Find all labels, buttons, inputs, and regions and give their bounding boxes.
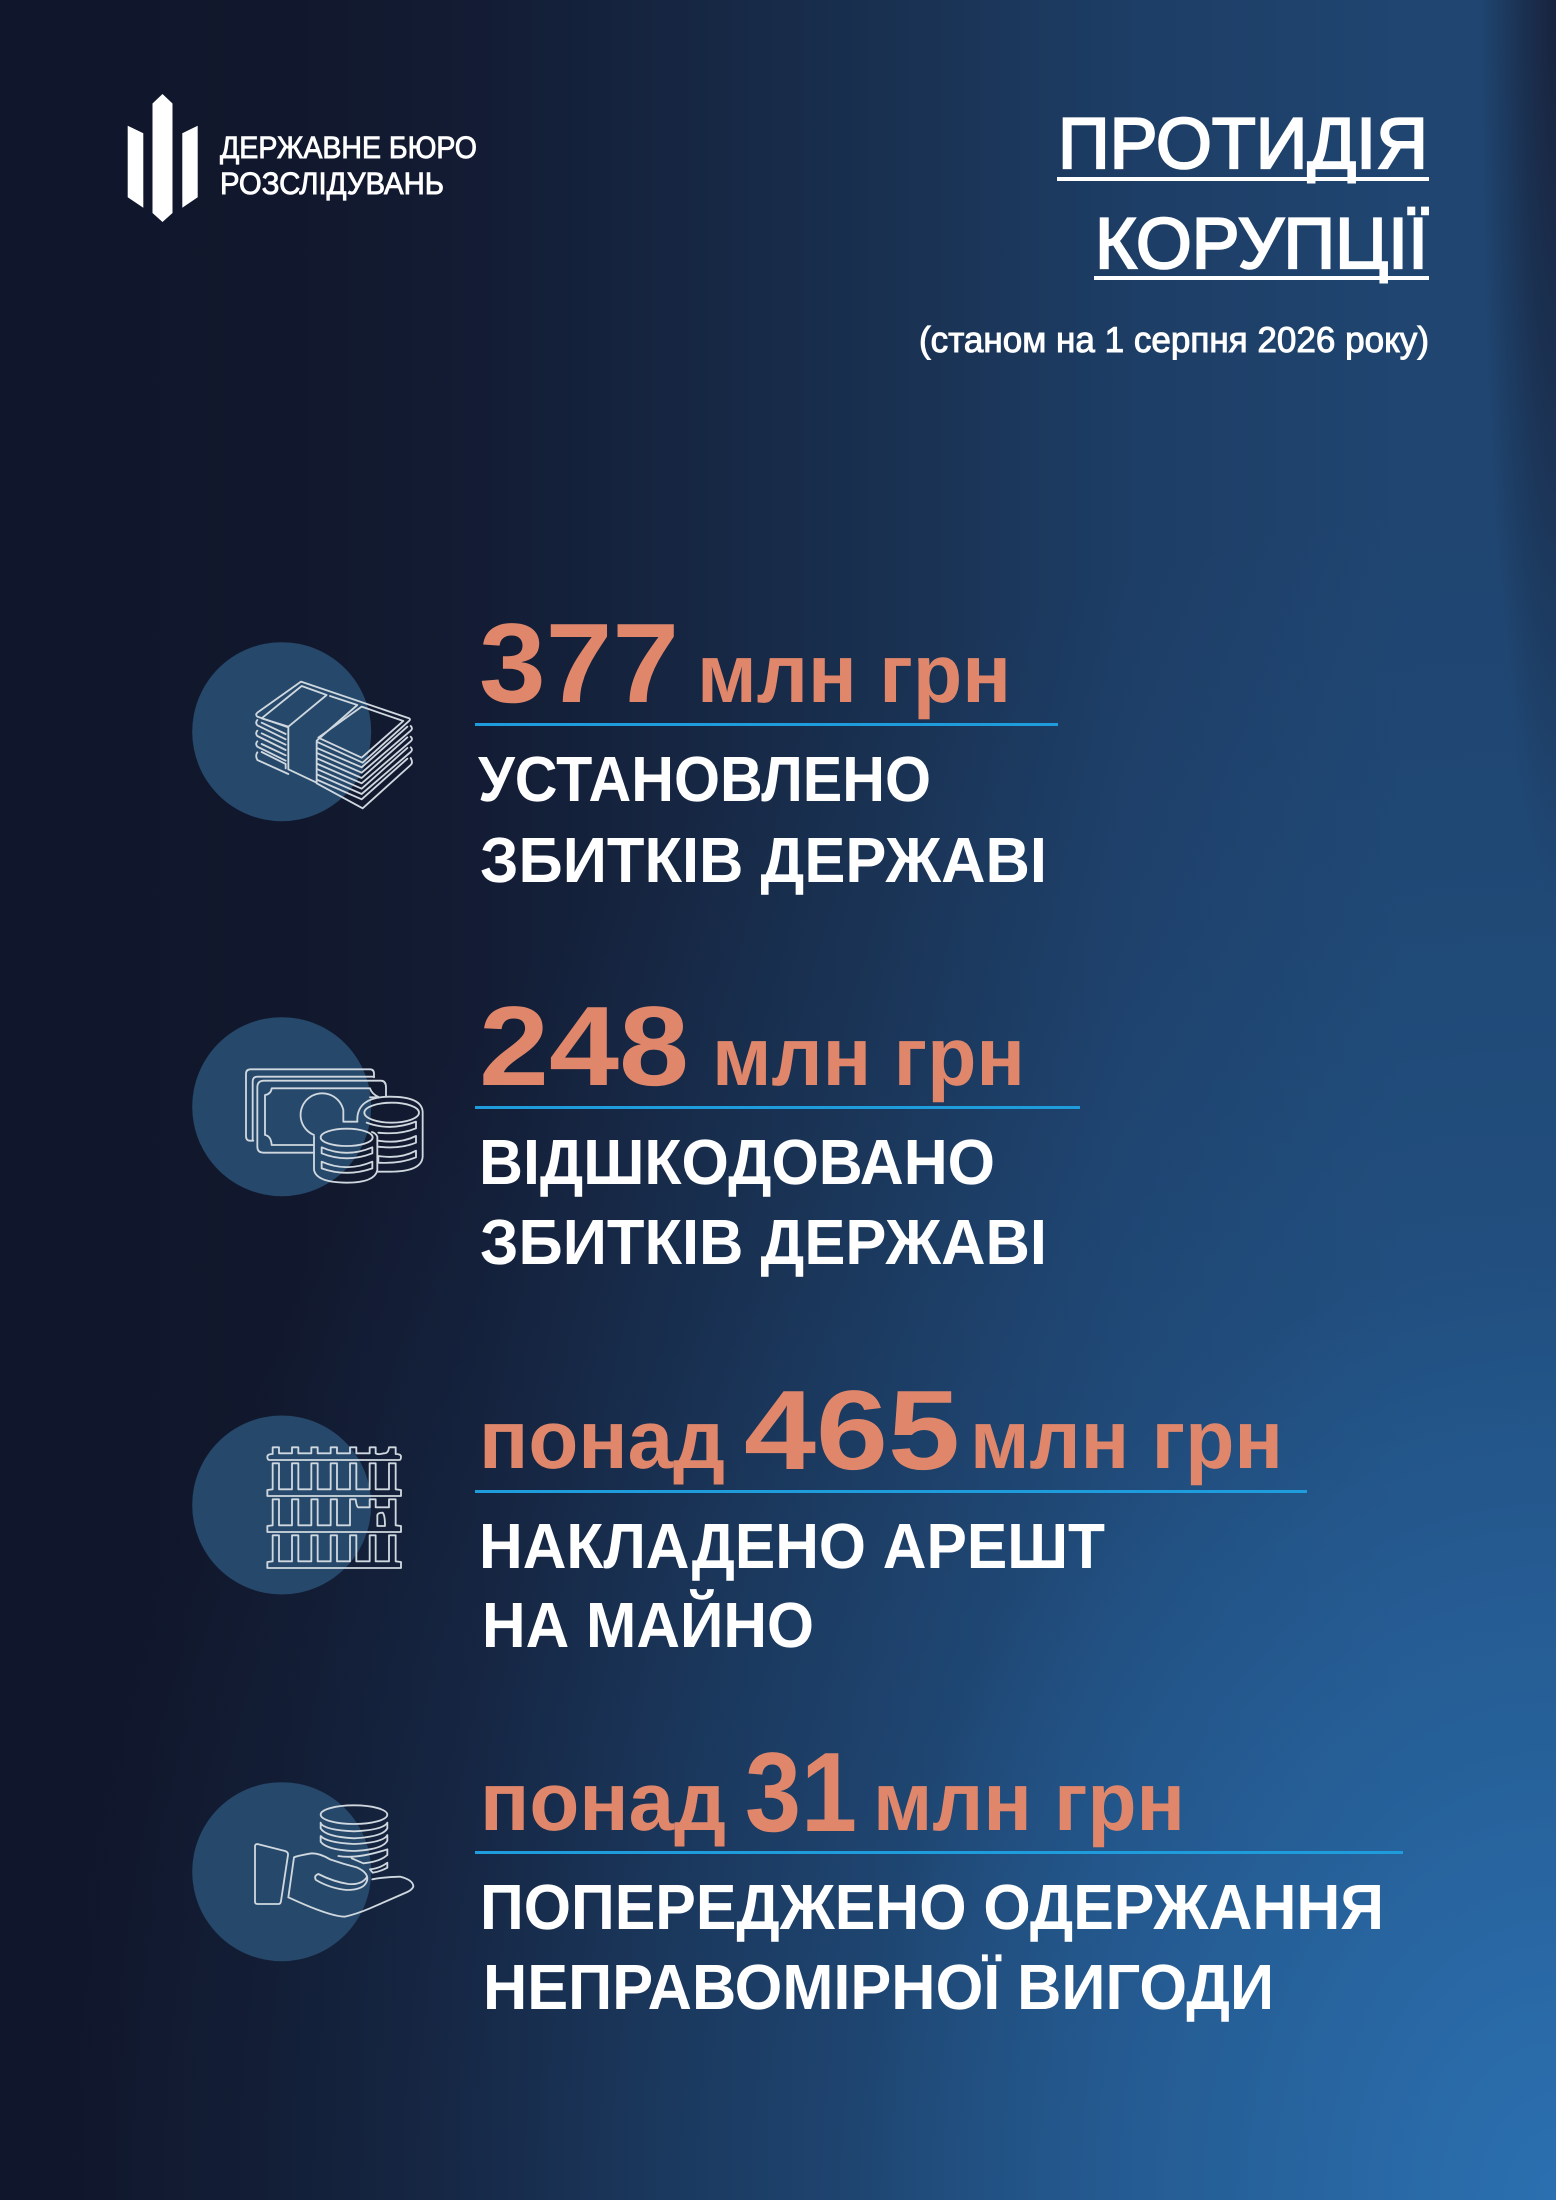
figure: 377 mln UAH: млн грн [697, 627, 1011, 720]
panel: property seized [192, 1367, 1307, 1661]
figure: 377 mln UAH: 377 [479, 600, 679, 726]
figure: over 31 mln UAH: 31 [745, 1729, 857, 1855]
caption: НАКЛАДЕНО АРЕШТ [479, 1510, 1105, 1582]
caption: НА МАЙНО [482, 1589, 814, 1661]
figure: 248 mln UAH: млн грн [712, 1010, 1025, 1103]
title: ПРОТИДІЯ [1058, 104, 1428, 184]
icon: banknotes and coins [192, 1017, 423, 1196]
figure: over 465 mln UAH [479, 1367, 1283, 1493]
figure: 248 mln UAH [479, 983, 1025, 1109]
panel: undue benefit prevented [192, 1729, 1403, 2023]
caption [478, 743, 1047, 896]
logo text: ДЕРЖАВНЕ БЮРО [220, 130, 477, 165]
caption [479, 1126, 1047, 1278]
figure: over 465 mln UAH: 465 [744, 1367, 960, 1493]
logo text [220, 130, 477, 201]
figure: over 31 mln UAH [480, 1729, 1185, 1855]
icon: hand with coins [192, 1782, 413, 1961]
figure: over 465 mln UAH: млн грн [970, 1393, 1283, 1486]
caption: ЗБИТКІВ ДЕРЖАВІ [480, 824, 1047, 896]
icon: stack of banknotes [192, 642, 412, 821]
figure: over 31 mln UAH: понад [480, 1755, 726, 1848]
caption [480, 1871, 1384, 2023]
caption [479, 1510, 1105, 1661]
figure: 377 mln UAH [479, 600, 1011, 726]
date note: (станом на 1 серпня 2026 року) [919, 319, 1429, 360]
title [1057, 104, 1429, 284]
panel: damages established [192, 600, 1058, 896]
title: КОРУПЦІЇ [1095, 204, 1428, 284]
icon: colonnade rows [192, 1416, 401, 1594]
caption: ЗБИТКІВ ДЕРЖАВІ [480, 1206, 1047, 1278]
figure: over 465 mln UAH: понад [479, 1393, 725, 1486]
figure: 248 mln UAH: 248 [479, 983, 689, 1109]
caption: НЕПРАВОМІРНОЇ ВИГОДИ [483, 1951, 1274, 2023]
caption: ПОПЕРЕДЖЕНО ОДЕРЖАННЯ [480, 1871, 1384, 1943]
caption: ВІДШКОДОВАНО [479, 1126, 995, 1198]
caption: УСТАНОВЛЕНО [478, 743, 931, 815]
icon: trident emblem [128, 94, 198, 222]
figure: over 31 mln UAH: млн грн [873, 1755, 1185, 1848]
logo: State Bureau of Investigation [128, 94, 477, 222]
panel: damages compensated [192, 983, 1080, 1278]
logo text: РОЗСЛІДУВАНЬ [220, 166, 444, 201]
